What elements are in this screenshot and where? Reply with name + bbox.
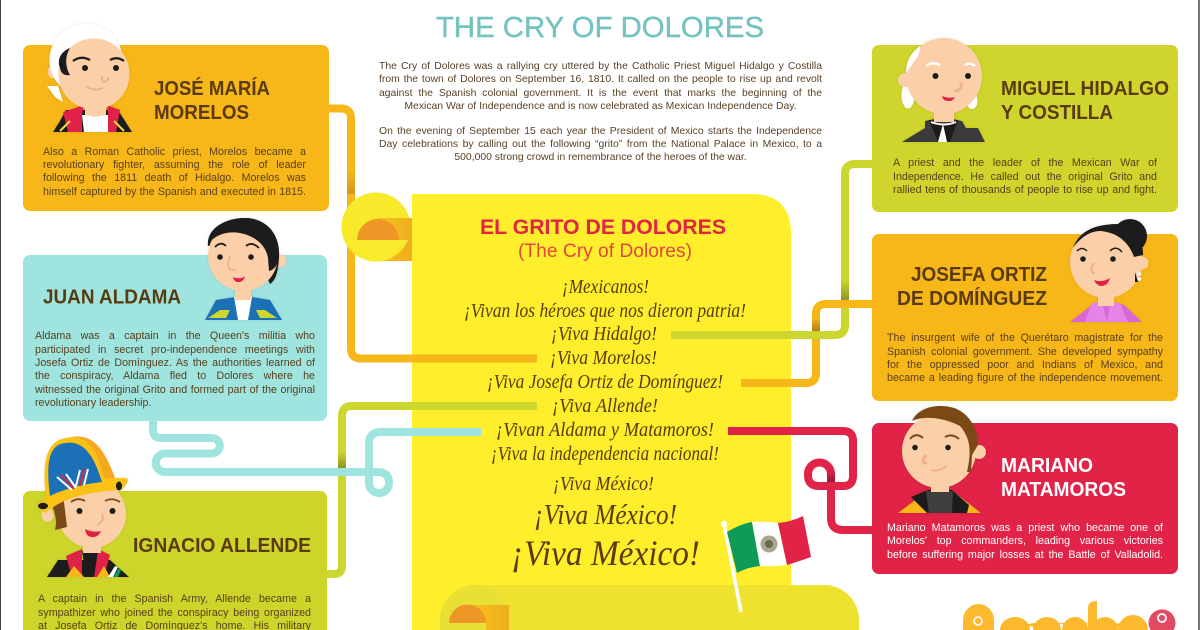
bio: Hidalgo	[893, 157, 1157, 196]
name: Aldama: JUAN ALDAMA	[43, 285, 181, 308]
bio: Josefa: for the oppressed poor and Indians of Mexico, and	[887, 359, 1163, 371]
bio: Josefa	[887, 332, 1163, 384]
bio: Matamoros	[887, 522, 1163, 561]
bio: Morelos: revolutionary fighter, assuming the role of leader	[43, 159, 306, 171]
panel: Mariano Matamoros	[872, 423, 1178, 574]
name: Matamoros	[1001, 454, 1126, 501]
bio: Josefa: became a leading figure of the independence movement.	[887, 372, 1163, 384]
title: THE CRY OF DOLORES	[436, 12, 764, 44]
character: Matamoros	[898, 406, 986, 513]
the grito lines: ¡Mexicanos!	[562, 276, 649, 298]
connector: Morelos	[328, 108, 537, 358]
name: Matamoros: MARIANO	[1001, 454, 1093, 477]
window edge right	[1198, 0, 1200, 630]
bio: Matamoros: Morelos' top commanders, leading various victories	[887, 535, 1163, 547]
panel: Ignacio Allende	[23, 491, 326, 630]
panel: Juan Aldama	[23, 254, 326, 421]
intro text: The Cry of Dolores was a rallying cry uttered by the Catholic Priest Miguel Hidalgo y Costilla	[379, 61, 822, 72]
name: Hidalgo	[1001, 77, 1169, 124]
intro text: from the town of Dolores on September 16, 1810. It called on the people to rise up and revolt	[379, 74, 822, 85]
bio: Aldama: the conspiracy, Aldama fled to Dolores where he	[35, 370, 315, 382]
connector: Hidalgo	[671, 164, 872, 335]
bio: Morelos: himself captured by the Spanish and executed in 1815.	[43, 186, 306, 198]
intro text: against the Spanish colonial government. It is the event that marks the beginning of the	[379, 88, 822, 99]
the grito lines: ¡Viva México!	[511, 533, 700, 573]
name: Matamoros: MATAMOROS	[1001, 478, 1126, 501]
name: Hidalgo: Y COSTILLA	[1001, 101, 1113, 124]
bio: Hidalgo: rallied tens of thousands of people to rise up and fight.	[893, 184, 1157, 196]
intro text	[379, 61, 822, 163]
name: Josefa: JOSEFA ORTIZ	[911, 263, 1047, 286]
name: Morelos: MORELOS	[154, 101, 249, 124]
bio: Allende	[38, 593, 311, 630]
connector: Allende	[326, 406, 537, 574]
intro text: 500,000 strong crowd in remembrance of the heroes of the war.	[454, 152, 747, 163]
the grito lines: ¡Viva Josefa Ortiz de Domínguez!	[487, 371, 723, 393]
bio: Allende: A captain in the Spanish Army, Allende became a	[38, 593, 311, 605]
panel: José María Morelos	[23, 45, 328, 211]
bio: Aldama: Josefa Ortiz de Domínguez. As the authorities learned of	[35, 357, 315, 369]
scroll bottom roll	[440, 585, 859, 630]
name: Allende: IGNACIO ALLENDE	[133, 534, 311, 557]
window edge left	[0, 0, 1, 630]
scroll heading: EL GRITO DE DOLORES	[480, 216, 726, 239]
name: Morelos	[154, 77, 270, 124]
the grito lines	[464, 276, 746, 573]
bio: Allende: sympathizer who joined the conspiracy being organized	[38, 607, 311, 619]
name: Josefa: DE DOMÍNGUEZ	[897, 287, 1047, 310]
character: Aldama	[205, 218, 286, 320]
bio: Morelos: following the 1811 death of Hidalgo. Morelos was	[43, 172, 306, 184]
character: Hidalgo	[898, 38, 985, 142]
the grito lines: ¡Viva la independencia nacional!	[491, 443, 719, 465]
bio: Hidalgo: Independence. He called out the original Grito and	[893, 171, 1157, 183]
the grito lines: ¡Viva Allende!	[552, 395, 658, 417]
bio: Josefa: Spanish colonial government. She developed sympathy	[887, 346, 1163, 358]
character: Morelos	[47, 24, 132, 132]
scroll heading	[480, 216, 726, 262]
name: Morelos: JOSÉ MARÍA	[154, 77, 270, 100]
the grito lines: ¡Viva México!	[534, 500, 677, 531]
the grito lines: ¡Vivan Aldama y Matamoros!	[496, 419, 714, 441]
bio: Aldama: witnessed the original Grito and formed part of the original	[35, 384, 315, 396]
the grito lines: ¡Viva México!	[553, 473, 654, 495]
bio: Hidalgo: A priest and the leader of the Mexican War of	[893, 157, 1157, 169]
bio: Morelos	[43, 146, 306, 198]
panel: Miguel Hidalgo	[872, 45, 1178, 212]
the grito lines: ¡Viva Morelos!	[550, 347, 657, 369]
icon: Mexican flag	[721, 516, 811, 612]
connector: Josefa	[741, 304, 872, 383]
bio: Aldama: participated in secret pro-independence meetings with	[35, 344, 315, 356]
bio: Matamoros: Mariano Matamoros was a priest who became one of	[887, 522, 1163, 534]
panel: Josefa Ortiz	[872, 234, 1178, 400]
bio: Aldama: revolutionary leadership.	[35, 397, 151, 409]
logo: Poncho	[963, 601, 1176, 630]
scroll body	[412, 194, 791, 630]
connector: Matamoros	[728, 431, 872, 530]
intro text: Mexican War of Independence and is now celebrated as Mexican Independence Day.	[404, 101, 797, 112]
bio: Aldama: Aldama was a captain in the Queen's militia who	[35, 330, 315, 342]
logo: Poncho: Poncho	[1004, 621, 1135, 629]
scroll heading: (The Cry of Dolores)	[518, 241, 692, 262]
intro text: On the evening of September 15 each year the President of Mexico starts the Independence	[379, 126, 822, 137]
bio: Aldama	[35, 330, 315, 409]
character: Josefa	[1070, 219, 1148, 322]
the grito lines: ¡Viva Hidalgo!	[551, 323, 657, 345]
scroll and connectors	[149, 104, 872, 630]
name: Hidalgo: MIGUEL HIDALGO	[1001, 77, 1169, 100]
bio: Morelos: Also a Roman Catholic priest, Morelos became a	[43, 146, 306, 158]
scroll top curl	[342, 170, 412, 262]
intro text: Day celebrations by calling out the following “grito” from the National Palace in Mexico, to a	[379, 139, 822, 150]
the grito lines: ¡Vivan los héroes que nos dieron patria!	[464, 300, 746, 322]
connector: Aldama	[153, 421, 481, 493]
bio: Josefa: The insurgent wife of the Querétaro magistrate for the	[887, 332, 1163, 344]
name: Josefa	[897, 263, 1047, 310]
character: Allende	[35, 436, 129, 577]
connector: Hidalgo crossing	[671, 331, 835, 339]
bio: Matamoros: before suffering major losses at the Battle of Valladolid.	[887, 549, 1163, 561]
